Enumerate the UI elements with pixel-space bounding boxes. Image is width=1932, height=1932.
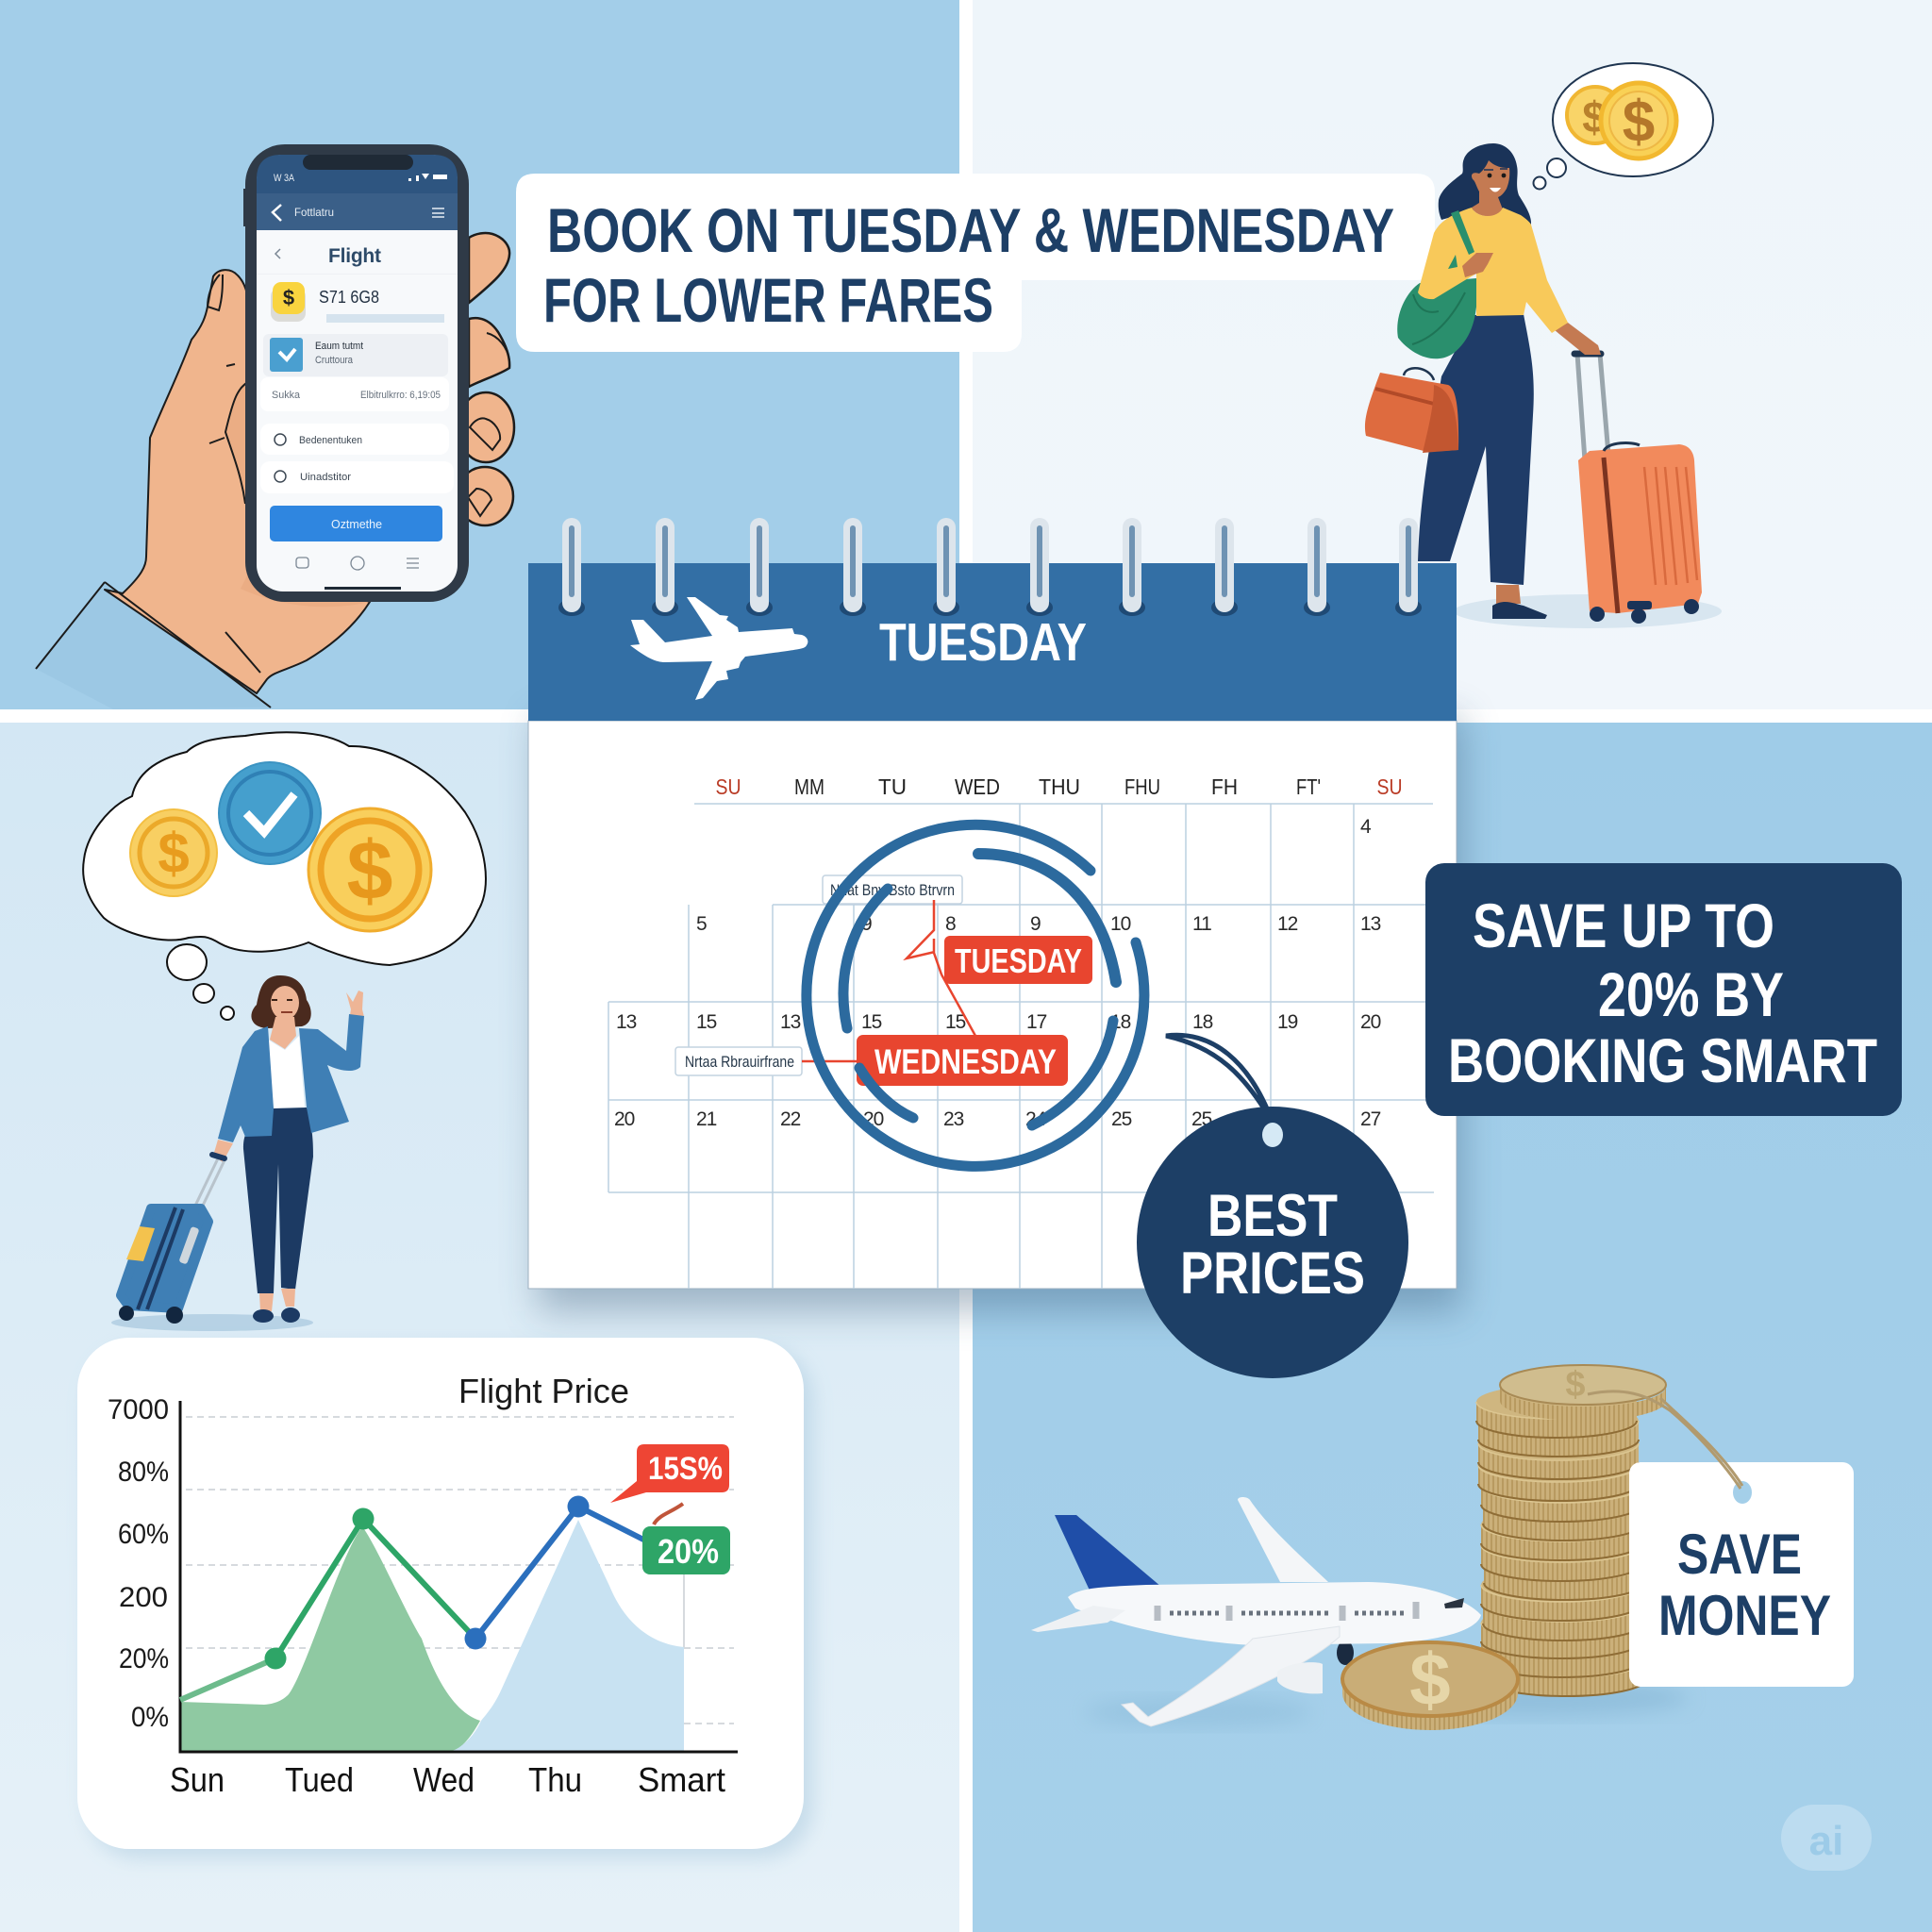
phone: Cruttoura [315, 355, 354, 366]
info row [263, 334, 448, 376]
blue area [451, 1520, 684, 1751]
phone header [257, 155, 458, 230]
blue suitcase [119, 1155, 225, 1324]
coin stack: $ [1565, 1365, 1586, 1405]
y axis labels: 20% [119, 1643, 169, 1674]
fingers [457, 233, 514, 525]
date numbers: 20 [1360, 1011, 1381, 1033]
thought bubble with coins [1534, 63, 1713, 189]
price row [271, 288, 306, 322]
weekday labels: SU [1377, 774, 1402, 799]
price line green [180, 1658, 275, 1700]
coin stack [1476, 1365, 1666, 1696]
price line blue [475, 1507, 651, 1639]
flight price chart card [77, 1338, 813, 1858]
tuesday label [944, 936, 1092, 984]
date numbers: 19 [1277, 1011, 1298, 1033]
thought bubble with coins: $ [1582, 92, 1607, 142]
date numbers: 15 [945, 1011, 966, 1033]
best prices tag: PRICES [1180, 1241, 1365, 1307]
airplane [1031, 1497, 1481, 1726]
navy trousers [1418, 314, 1534, 585]
phone [243, 144, 469, 602]
wrist [213, 1140, 233, 1162]
check badge [219, 762, 321, 864]
y axis labels [108, 1394, 169, 1733]
green area [180, 1526, 480, 1751]
thought cloud: $ [158, 822, 190, 885]
phone: W 3A [274, 173, 295, 184]
weekday labels: FT' [1296, 774, 1321, 799]
plane icon [630, 597, 808, 700]
x axis labels [170, 1760, 725, 1799]
yellow sweater [1418, 208, 1568, 333]
red badge [610, 1444, 729, 1503]
date numbers: 20 [863, 1108, 884, 1130]
ai watermark: ai [1809, 1818, 1843, 1864]
weekday labels [715, 774, 1402, 799]
calendar [528, 518, 1462, 1311]
chart title: Flight Price [458, 1372, 629, 1410]
phone: Sukka [272, 390, 301, 401]
save up to callout: 20% BY [1598, 959, 1784, 1029]
phone: S71 6G8 [319, 288, 379, 307]
wednesday label: WEDNESDAY [874, 1042, 1057, 1081]
phone: $ [283, 286, 294, 309]
phone body [245, 144, 469, 602]
gridlines [186, 1417, 734, 1724]
wednesday label [857, 1035, 1068, 1086]
date numbers: 4 [1360, 816, 1372, 838]
x axis labels: Smart [638, 1760, 725, 1799]
feet and shoes [259, 1289, 295, 1311]
ai watermark [1781, 1805, 1872, 1871]
left coin [130, 809, 217, 896]
date numbers: 13 [1360, 913, 1381, 935]
date numbers: 11 [1192, 913, 1211, 935]
small callout label top: Nhat Bny Bsto Btrvrn [830, 881, 955, 899]
waving hand [346, 991, 364, 1017]
green badge: 20% [658, 1532, 719, 1571]
foot and shoe [1496, 585, 1521, 604]
save money tag: SAVE [1677, 1523, 1802, 1586]
traveler woman with orange suitcase [1365, 63, 1722, 628]
small callout label left: Nrtaa Rbrauirfrane [685, 1053, 794, 1071]
ground shadow [111, 1314, 313, 1331]
date numbers: 5 [696, 913, 707, 935]
title line 1: BOOK ON TUESDAY & WEDNESDAY [547, 195, 1394, 265]
weekday labels: SU [715, 774, 741, 799]
date numbers: 24 [1025, 1108, 1047, 1130]
date numbers: 15 [696, 1011, 717, 1033]
calendar page [528, 721, 1457, 1289]
date numbers: 10 [1110, 913, 1131, 935]
title line 2: FOR LOWER FARES [543, 265, 993, 335]
phone: Eaum tutmt [315, 341, 363, 352]
thought bubble with coins: $ [1623, 90, 1655, 155]
card shadow [87, 1347, 813, 1858]
date numbers: 9 [1030, 913, 1041, 935]
y axis labels: 0% [131, 1702, 169, 1733]
bag strap [1451, 210, 1474, 255]
y axis labels: 200 [119, 1582, 168, 1613]
calendar grid [608, 804, 1457, 1289]
small callout label left [675, 1047, 802, 1075]
date numbers: 23 [943, 1108, 964, 1130]
date numbers: 22 [780, 1108, 801, 1130]
neck and face [1472, 160, 1509, 216]
list items [260, 424, 449, 455]
save up to callout [1425, 863, 1902, 1116]
phone: Oztmethe [331, 517, 382, 531]
weekday labels: FHU [1124, 774, 1160, 799]
date numbers: 18 [1110, 1011, 1131, 1033]
date numbers: 21 [696, 1108, 717, 1130]
x axis labels: Wed [413, 1760, 475, 1799]
date numbers: 9 [861, 913, 872, 935]
weekday labels: WED [955, 774, 1000, 799]
summary row [260, 377, 449, 411]
date numbers: 25 [1111, 1108, 1132, 1130]
date numbers: 25 [1191, 1108, 1212, 1130]
y axis labels: 80% [118, 1457, 169, 1488]
right coin [308, 808, 431, 931]
date numbers: 15 [861, 1011, 882, 1033]
save up to callout: SAVE UP TO [1473, 891, 1774, 960]
data points [264, 1496, 589, 1670]
save money tag: MONEY [1658, 1584, 1831, 1647]
best prices tag: BEST [1208, 1183, 1338, 1249]
date numbers: 27 [1360, 1108, 1381, 1130]
tag strap [1166, 1035, 1273, 1123]
thought cloud [83, 732, 486, 1020]
red connector lines [802, 900, 975, 1061]
calendar shadow [538, 717, 1462, 1311]
save money tag [1588, 1391, 1854, 1687]
weekday labels: THU [1039, 774, 1080, 799]
suitcase handle [1577, 354, 1608, 460]
nav bar [296, 558, 308, 568]
date numbers: 18 [1192, 1011, 1213, 1033]
date numbers: 8 [945, 913, 956, 935]
x axis labels: Tued [285, 1760, 354, 1799]
phone: Elbitrulkrro: 6,19:05 [360, 390, 441, 401]
hair [1439, 143, 1531, 225]
businesswoman with thought cloud [83, 732, 486, 1331]
sleeve [36, 582, 271, 709]
x axis labels: Thu [528, 1760, 582, 1799]
date numbers: 13 [616, 1011, 637, 1033]
soft shadows [1085, 1697, 1311, 1727]
blue circle highlight [807, 824, 1144, 1166]
single coin: $ [1409, 1638, 1451, 1721]
flight title: Flight [328, 245, 381, 267]
date numbers [614, 816, 1381, 1130]
spiral rings [558, 518, 1422, 616]
tuesday label: TUESDAY [955, 941, 1082, 980]
right forearm [1555, 323, 1601, 355]
orange hand bag [1365, 373, 1458, 452]
hand gesture [1462, 253, 1493, 277]
green shoulder bag [1397, 278, 1477, 358]
green badge [642, 1526, 730, 1574]
date numbers: 17 [1026, 1011, 1047, 1033]
white shirt [268, 1036, 305, 1108]
thought cloud: $ [347, 824, 392, 917]
weekday labels: TU [878, 774, 907, 799]
button [270, 506, 442, 541]
date numbers: 12 [1277, 913, 1298, 935]
weekday labels: FH [1211, 774, 1238, 799]
blue jacket [218, 1026, 274, 1142]
y axis labels: 60% [118, 1519, 169, 1550]
x axis labels: Sun [170, 1760, 225, 1799]
face [271, 986, 299, 1020]
ground shadow [1454, 594, 1722, 628]
hand holding phone [36, 233, 514, 709]
orange suitcase [1578, 443, 1702, 624]
axes [180, 1401, 738, 1752]
weekday labels: MM [794, 774, 824, 799]
pants [243, 1108, 313, 1293]
date numbers: 13 [780, 1011, 801, 1033]
title card [516, 174, 1435, 352]
small callout label top [823, 875, 962, 904]
header day label: TUESDAY [879, 612, 1087, 673]
phone: Fottlatru [294, 206, 334, 219]
red badge: 15S% [648, 1451, 723, 1487]
hand palm [105, 270, 370, 693]
phone: Bedenentuken [299, 435, 362, 446]
single coin [1342, 1638, 1518, 1730]
y axis labels: 7000 [108, 1394, 169, 1425]
coin stack, plane and save money tag [1031, 1365, 1854, 1730]
calendar header [528, 563, 1457, 721]
phone: Uinadstitor [300, 472, 351, 483]
date numbers: 20 [614, 1108, 635, 1130]
hair [251, 975, 311, 1028]
best prices tag [1137, 1035, 1408, 1378]
